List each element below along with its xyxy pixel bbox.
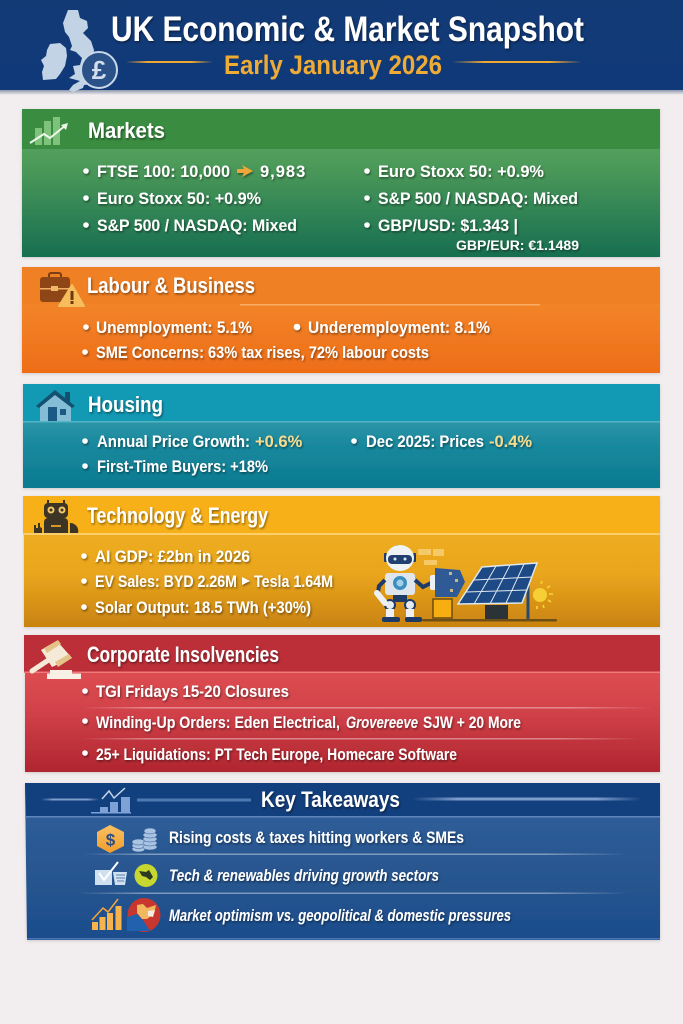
- small floating cards: [418, 549, 444, 565]
- list: housing figures: Dec 2025: Prices: [366, 433, 484, 451]
- list: labour figures: [82, 319, 490, 362]
- icon: red badge with figure: [127, 898, 160, 932]
- left rule: [126, 61, 213, 63]
- list: markets right column: GBP/USD: $1.343 |: [378, 217, 518, 235]
- takeaway: rising costs: [97, 825, 464, 853]
- list: technology figures: Tesla 1.64M: [254, 573, 333, 591]
- list: insolvency items: Grovereeve: [346, 714, 418, 732]
- panel: housing: [23, 384, 660, 488]
- list: markets right column: Euro Stoxx 50: +0.9%: [378, 163, 544, 181]
- list: markets left column: [83, 163, 306, 235]
- right rule: [452, 61, 582, 63]
- list: markets right column: GBP/EUR: €1.1489: [456, 238, 579, 253]
- list: insolvency items: Winding-Up Orders: Eden Electrical,: [96, 714, 340, 732]
- icon: briefcase with warning sign: [40, 273, 84, 306]
- icon: dollar hexagon: [97, 825, 124, 853]
- list: housing figures: [82, 433, 532, 476]
- robot: [377, 545, 442, 622]
- list: labour figures: Underemployment: 8.1%: [308, 319, 490, 337]
- icon: chart heading: [91, 788, 131, 814]
- illustration: robot with solar panel: [377, 545, 557, 622]
- panel: markets: [22, 109, 660, 257]
- list: markets left column: FTSE 100: 10,000: [97, 163, 230, 181]
- list: insolvency items: TGI Fridays 15-20 Closures: [96, 683, 289, 701]
- list: housing figures: +0.6%: [255, 433, 303, 451]
- icon: green badge: [134, 864, 158, 887]
- list: markets left column: 9,983: [260, 163, 306, 181]
- icon: dollar hexagon: $: [106, 830, 116, 850]
- title: UK Economic & Market Snapshot: [111, 10, 584, 49]
- list: housing figures: First-Time Buyers: +18%: [97, 458, 268, 476]
- list: technology figures: EV Sales: BYD 2.26M: [95, 573, 237, 591]
- heading: housing: Housing: [88, 392, 163, 417]
- icon: orange rising bars: [92, 899, 122, 930]
- list: markets right column: [364, 163, 579, 253]
- panel: labour and business: [22, 267, 660, 373]
- list: labour figures: Unemployment: 5.1%: [96, 319, 252, 337]
- solar panel: [458, 563, 537, 619]
- panel: technology and energy: [23, 496, 660, 627]
- icon: gavel: [32, 640, 81, 679]
- icon: house: [36, 390, 75, 421]
- inverter box: [433, 568, 465, 618]
- heading: technology and energy: Technology & Energy: [87, 503, 268, 528]
- heading: markets: Markets: [88, 118, 165, 143]
- panel: corporate insolvencies: [24, 635, 660, 772]
- icon: coin stacks: [132, 828, 157, 852]
- heading: labour and business: Labour & Business: [87, 273, 255, 298]
- list: technology figures: Solar Output: 18.5 TWh (+30%): [95, 599, 311, 617]
- icon: UK map with pound coin: [41, 10, 117, 92]
- icon: rising chart: [30, 117, 68, 145]
- heading: corporate insolvencies: Corporate Insolvencies: [87, 642, 279, 667]
- panel: key takeaways: [25, 783, 660, 940]
- text: rising costs: Rising costs & taxes hitting workers & SMEs: [169, 829, 464, 847]
- sun: [533, 581, 553, 609]
- list: markets right column: S&P 500 / NASDAQ: Mixed: [378, 190, 578, 208]
- subtitle: Early January 2026: [224, 50, 442, 80]
- icon: checkbox and document: [95, 862, 127, 885]
- list: labour figures: SME Concerns: 63% tax rises, 72% labour costs: [96, 344, 429, 362]
- heading: key takeaways: Key Takeaways: [261, 787, 400, 812]
- list: housing figures: Annual Price Growth:: [97, 433, 250, 451]
- icon: UK map with pound coin: £: [92, 55, 107, 85]
- list: insolvency items: SJW + 20 More: [423, 714, 521, 732]
- list: insolvency items: 25+ Liquidations: PT Tech Europe, Homecare Software: [96, 746, 457, 764]
- list: insolvency items: [82, 683, 521, 764]
- takeaway: tech and renewables: [95, 862, 439, 887]
- icon: robot head and shoulders: [34, 500, 78, 533]
- header banner: [0, 0, 683, 95]
- text: tech and renewables: Tech & renewables driving growth sectors: [169, 867, 439, 885]
- list: technology figures: AI GDP: £2bn in 2026: [95, 548, 250, 566]
- takeaway: market optimism: [92, 898, 511, 932]
- list: housing figures: -0.4%: [489, 433, 532, 451]
- list: technology figures: [81, 548, 333, 617]
- list: markets left column: Euro Stoxx 50: +0.9%: [97, 190, 261, 208]
- list: markets left column: S&P 500 / NASDAQ: Mixed: [97, 217, 297, 235]
- text: market optimism: Market optimism vs. geopolitical & domestic pressures: [169, 907, 511, 925]
